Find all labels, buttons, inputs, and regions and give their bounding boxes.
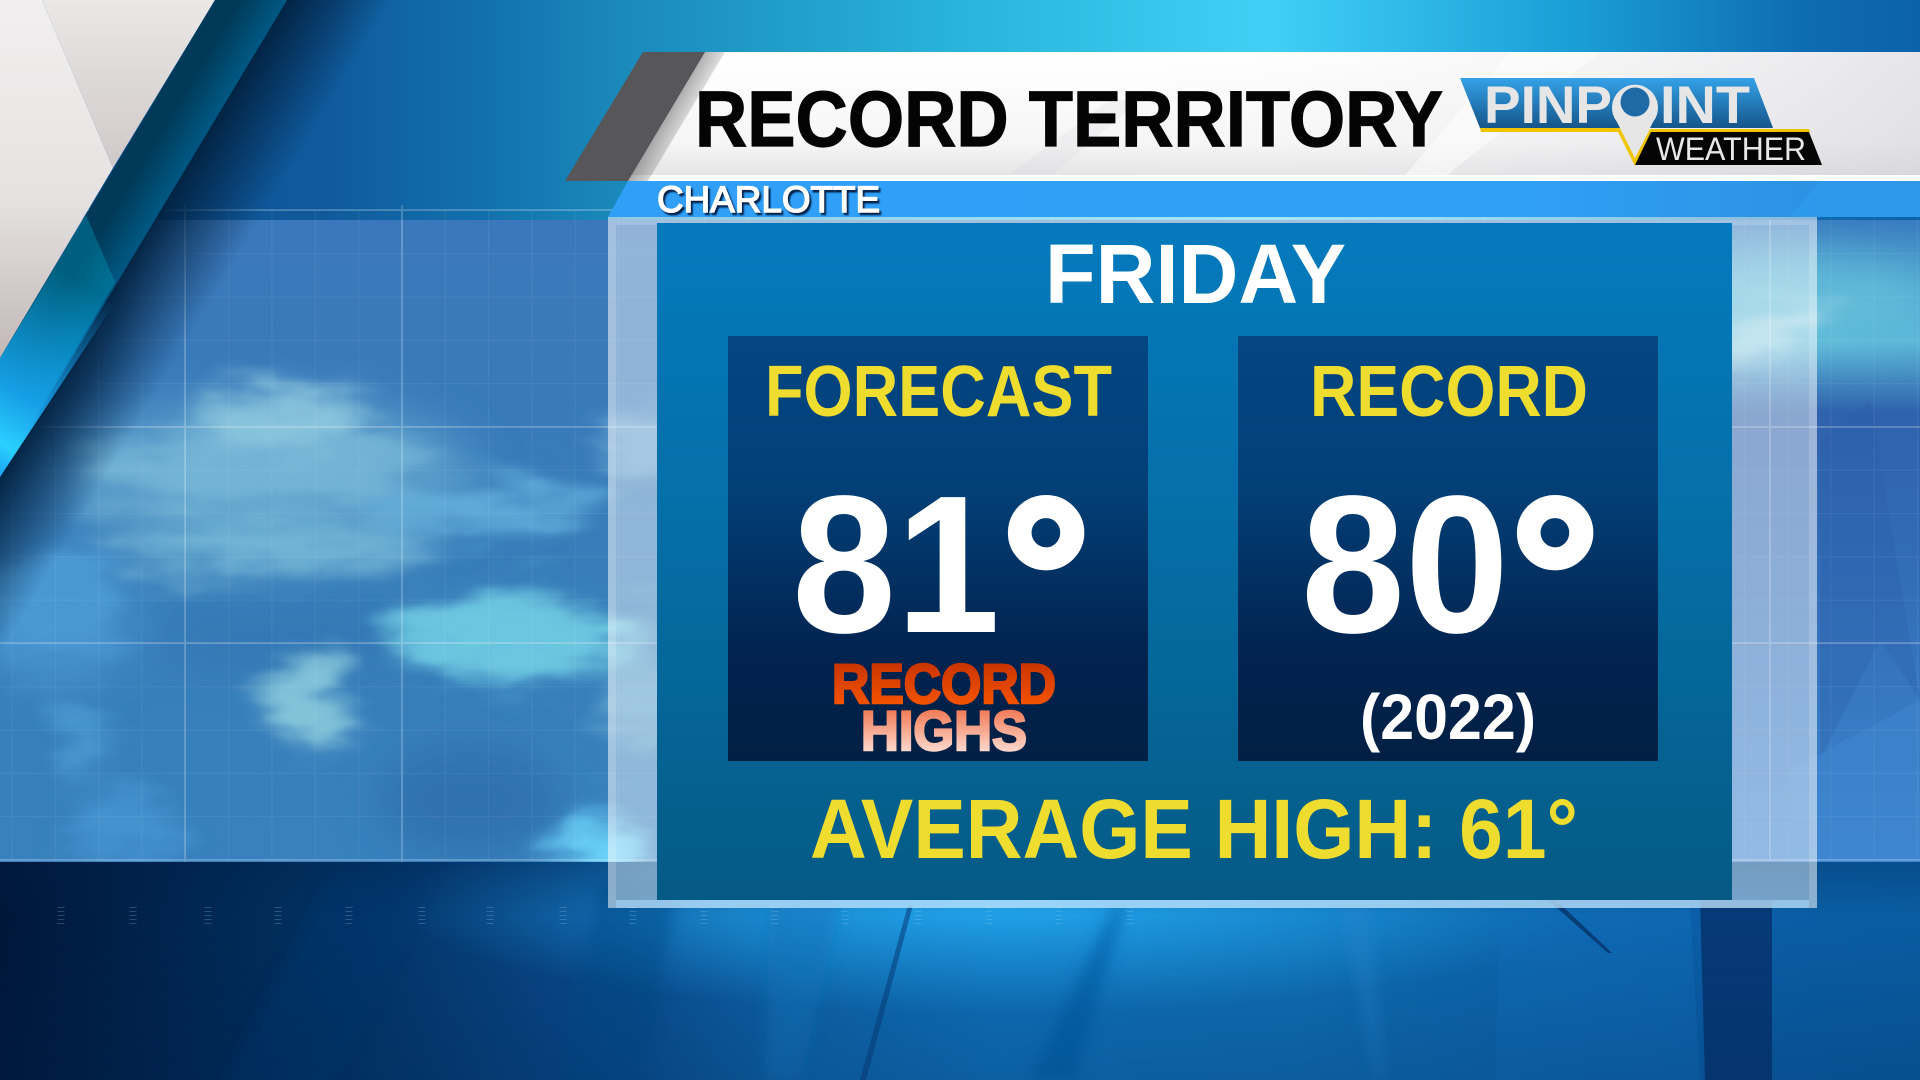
forecast temperature: ° — [1002, 453, 1090, 701]
main panel — [657, 223, 1732, 900]
record temperature — [1301, 453, 1599, 701]
decorative corner wedge — [0, 0, 600, 700]
forecast temperature: 81 — [792, 455, 1000, 674]
forecast temperature — [792, 453, 1090, 701]
background: sky with clouds — [0, 220, 1920, 882]
background: lower floor — [0, 860, 1920, 1080]
location bar — [608, 179, 1920, 220]
record label: RECORD — [1310, 352, 1588, 432]
panel: record — [1238, 336, 1658, 761]
day heading: FRIDAY — [1045, 227, 1346, 321]
record highs badge — [832, 652, 1056, 762]
title: RECORD TERRITORY — [695, 74, 1443, 163]
panel: forecast — [728, 336, 1148, 762]
record year: (2022) — [1360, 681, 1536, 753]
forecast label: FORECAST — [765, 352, 1112, 432]
Pinpoint Weather logo: INT — [1660, 76, 1750, 135]
gray accent slant — [565, 52, 705, 181]
Pinpoint Weather logo — [1460, 76, 1822, 167]
glass frame — [608, 217, 1817, 908]
record temperature: 80 — [1301, 455, 1509, 674]
record temperature: ° — [1511, 453, 1599, 701]
location label: CHARLOTTE — [657, 179, 880, 220]
record highs badge: RECORD — [832, 652, 1056, 715]
average high: AVERAGE HIGH: 61° — [810, 782, 1578, 876]
background: grid lines — [0, 205, 1920, 870]
Pinpoint Weather logo: PINP — [1484, 76, 1612, 135]
record highs badge: HIGHS — [861, 699, 1027, 762]
Pinpoint Weather logo: WEATHER — [1656, 131, 1806, 167]
background: top blue band — [0, 0, 1920, 225]
header banner — [565, 52, 1920, 181]
